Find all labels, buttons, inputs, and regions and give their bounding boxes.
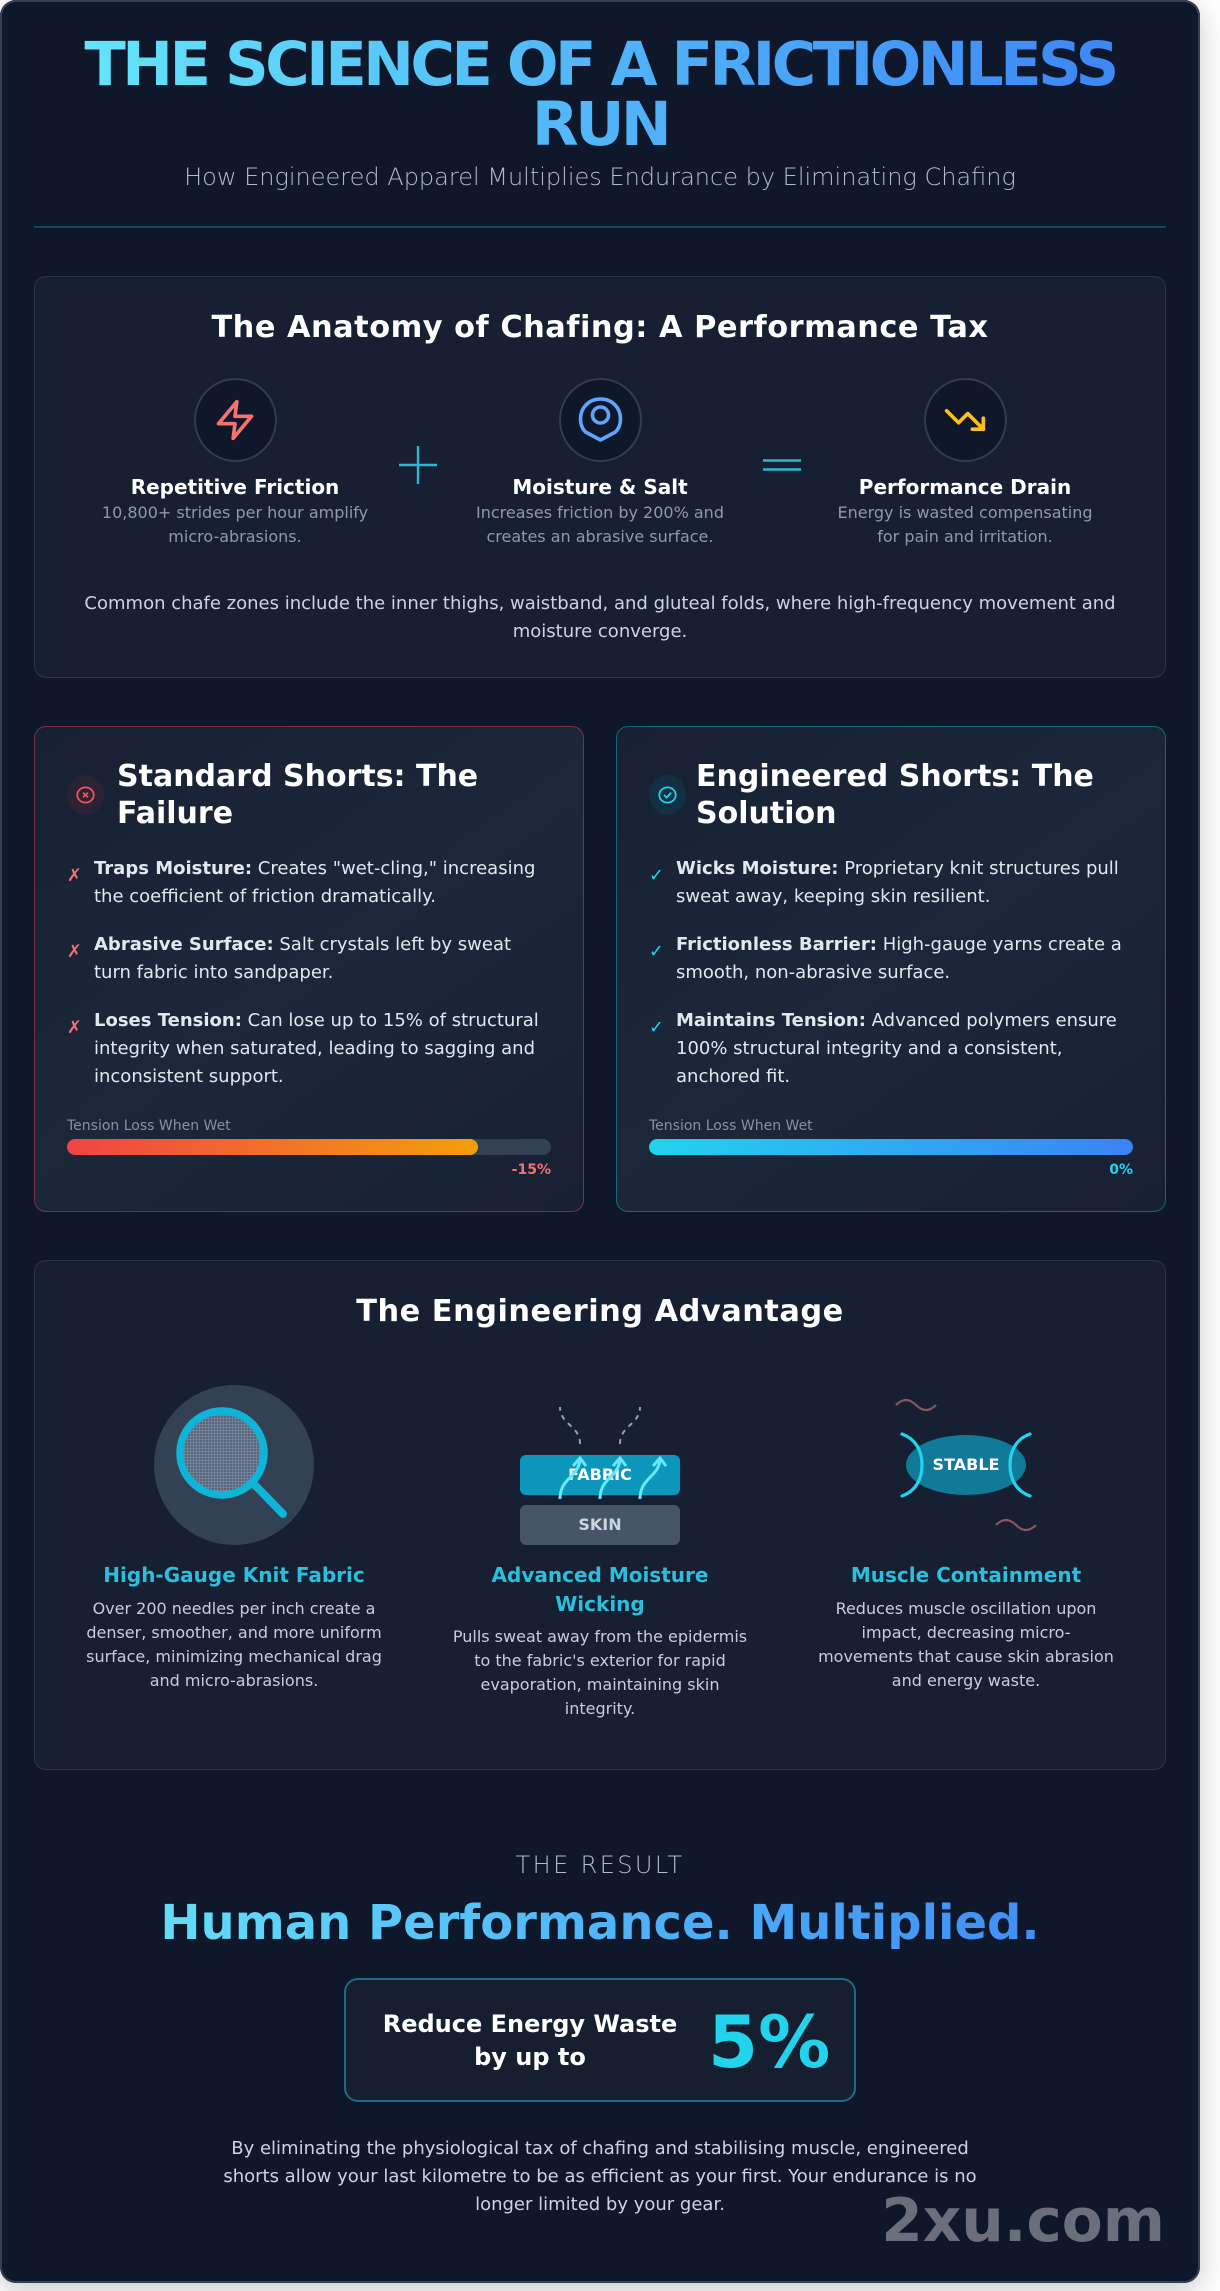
feature description: and energy waste.: [892, 1671, 1040, 1690]
list item: maintains tension: 100% structural integrity and a consistent,: [676, 1038, 1062, 1059]
result eyebrow: THE RESULT: [516, 1851, 684, 1879]
feature title: Muscle Containment: [851, 1563, 1081, 1587]
feature description: Reduces muscle oscillation upon: [836, 1599, 1096, 1618]
feature: high-gauge knit: [86, 1385, 382, 1690]
stat value: 5%: [708, 2000, 830, 2084]
panel: anatomy of chafing: [34, 276, 1166, 678]
feature: muscle containment: [818, 1398, 1114, 1690]
list item: abrasive surface: ✗: [67, 942, 82, 962]
feature description: integrity.: [565, 1699, 635, 1718]
panel: engineered shorts: [616, 726, 1166, 1212]
heading icon: failure: [67, 775, 104, 815]
meter value: -15%: [512, 1162, 551, 1178]
feature description: [818, 1599, 1114, 1690]
closing paragraph: [223, 2138, 977, 2214]
list item: maintains tension: [649, 1010, 1117, 1087]
list item: frictionless barrier: smooth, non-abrasive surface.: [676, 962, 950, 983]
watermark: 2xu.com: [881, 2187, 1165, 2256]
heading: standard shorts: [117, 759, 478, 831]
stat label: by up to: [474, 2042, 586, 2070]
illustration: wicking layers: [520, 1407, 680, 1545]
list item: abrasive surface: turn fabric into sandpaper.: [94, 962, 333, 983]
feature description: denser, smoother, and more uniform: [86, 1623, 382, 1642]
factor title: Repetitive Friction: [131, 475, 339, 499]
result headline: Human Performance. Multiplied.: [160, 1895, 1040, 1951]
factor: moisture and salt: [476, 378, 724, 546]
list item: maintains tension: ✓: [649, 1018, 664, 1038]
list item: wicks moisture: sweat away, keeping skin resilient.: [676, 886, 990, 907]
feature: moisture wicking: [453, 1407, 747, 1718]
stat label: [383, 2010, 677, 2070]
meter label: Tension Loss When Wet: [67, 1118, 231, 1134]
panel: standard shorts: [34, 726, 584, 1212]
heading: engineered shorts: Solution: [696, 796, 836, 831]
closing paragraph: By eliminating the physiological tax of chafing and stabilising muscle, engineered: [231, 2138, 969, 2158]
factor description: micro-abrasions.: [168, 527, 302, 546]
factor: performance drain: [837, 378, 1093, 546]
list item: frictionless barrier: Frictionless Barrier: High-gauge yarns create a: [676, 934, 1122, 955]
heading: engineered shorts: Engineered Shorts: The: [696, 759, 1094, 794]
feature description: to the fabric's exterior for rapid: [474, 1651, 726, 1670]
heading: engineered shorts: [696, 759, 1094, 831]
closing paragraph: longer limited by your gear.: [475, 2194, 725, 2214]
list item: traps moisture: Traps Moisture: Creates "wet-cling," increasing: [94, 858, 535, 879]
feature description: and micro-abrasions.: [150, 1671, 318, 1690]
list item: traps moisture: ✗: [67, 866, 82, 886]
operator: equals: [763, 459, 801, 471]
feature description: surface, minimizing mechanical drag: [86, 1647, 382, 1666]
title: RUN: [532, 90, 668, 160]
list item: wicks moisture: ✓: [649, 866, 664, 886]
list item: maintains tension: anchored fit.: [676, 1066, 790, 1087]
chafe zones note: moisture converge.: [513, 620, 687, 642]
tension meter: standard: [66, 1118, 551, 1178]
panel: engineering advantage: [34, 1260, 1166, 1770]
meter label: Tension Loss When Wet: [649, 1118, 813, 1134]
factor description: for pain and irritation.: [877, 527, 1053, 546]
illustration: stabilised muscle: [895, 1398, 1037, 1532]
factor description: creates an abrasive surface.: [486, 527, 713, 546]
feature title: High-Gauge Knit Fabric: [103, 1563, 365, 1587]
list item: traps moisture: the coefficient of friction dramatically.: [94, 886, 436, 907]
feature description: movements that cause skin abrasion: [818, 1647, 1114, 1666]
icon: trending down: [924, 378, 1006, 462]
feature title: Wicking: [555, 1592, 645, 1616]
feature description: impact, decreasing micro-: [862, 1623, 1070, 1642]
illustration: wicking layers: SKIN: [578, 1515, 622, 1534]
list item: abrasive surface: Abrasive Surface: Salt crystals left by sweat: [94, 934, 511, 955]
factor description: [102, 503, 368, 546]
feature description: evaporation, maintaining skin: [481, 1675, 719, 1694]
factor description: Increases friction by 200% and: [476, 503, 724, 522]
stat label: Reduce Energy Waste: [383, 2010, 677, 2038]
heading: anatomy: The Anatomy of Chafing: A Performance Tax: [211, 310, 989, 345]
list item: traps moisture: [67, 858, 535, 907]
stat box: [344, 1978, 856, 2102]
list item: abrasive surface: [67, 934, 511, 983]
heading icon: solution: [649, 775, 686, 815]
title: THE SCIENCE OF A FRICTIONLESS: [84, 30, 1116, 100]
meter value: 0%: [1109, 1162, 1133, 1178]
factor title: Performance Drain: [859, 475, 1071, 499]
list item: maintains tension: Maintains Tension: Advanced polymers ensure: [676, 1010, 1117, 1031]
chafe zones note: Common chafe zones include the inner thighs, waistband, and gluteal folds, where high-frequency movement and: [84, 592, 1116, 614]
feature description: Over 200 needles per inch create a: [93, 1599, 375, 1618]
heading: standard shorts: Standard Shorts: The: [117, 759, 478, 794]
list item: wicks moisture: Wicks Moisture: Proprietary knit structures pull: [676, 858, 1119, 879]
factor description: [476, 503, 724, 546]
header: [84, 30, 1116, 191]
factor: repetitive friction: [102, 378, 368, 546]
list item: loses tension: ✗: [67, 1018, 82, 1038]
meter bar: [67, 1139, 551, 1155]
factor description: Energy is wasted compensating: [837, 503, 1093, 522]
feature description: Pulls sweat away from the epidermis: [453, 1627, 747, 1646]
list item: wicks moisture: [649, 858, 1119, 907]
icon: moisture shield: [558, 378, 642, 462]
feature title: Advanced Moisture: [492, 1563, 708, 1587]
section: result: [160, 1851, 1165, 2256]
list item: frictionless barrier: [649, 934, 1122, 983]
heading: standard shorts: Failure: [117, 796, 233, 831]
feature title: [492, 1563, 708, 1616]
factor description: [837, 503, 1093, 546]
feature description: [86, 1599, 382, 1690]
list item: loses tension: Loses Tension: Can lose up to 15% of structural: [94, 1010, 539, 1031]
factor title: Moisture & Salt: [512, 475, 688, 499]
list item: loses tension: integrity when saturated, leading to sagging and: [94, 1038, 535, 1059]
illustration: wicking layers: FABRIC: [568, 1465, 632, 1484]
meter bar: [649, 1139, 1133, 1155]
factor description: 10,800+ strides per hour amplify: [102, 503, 368, 522]
tension meter: engineered: [648, 1118, 1133, 1178]
list item: frictionless barrier: ✓: [649, 942, 664, 962]
subtitle: How Engineered Apparel Multiplies Endurance by Eliminating Chafing: [184, 163, 1016, 191]
operator: plus: [399, 446, 437, 484]
illustration: stabilised muscle: STABLE: [933, 1455, 999, 1474]
heading: engineering advantage: The Engineering Advantage: [356, 1294, 844, 1329]
closing paragraph: shorts allow your last kilometre to be as efficient as your first. Your endurance is no: [223, 2166, 977, 2186]
list item: loses tension: inconsistent support.: [94, 1066, 284, 1087]
feature description: [453, 1627, 747, 1718]
illustration: magnifier over knit: [154, 1385, 314, 1545]
icon: lightning bolt: [194, 378, 276, 462]
chafe zones note: [84, 592, 1116, 642]
list item: loses tension: [67, 1010, 539, 1087]
title: [34, 35, 1166, 155]
